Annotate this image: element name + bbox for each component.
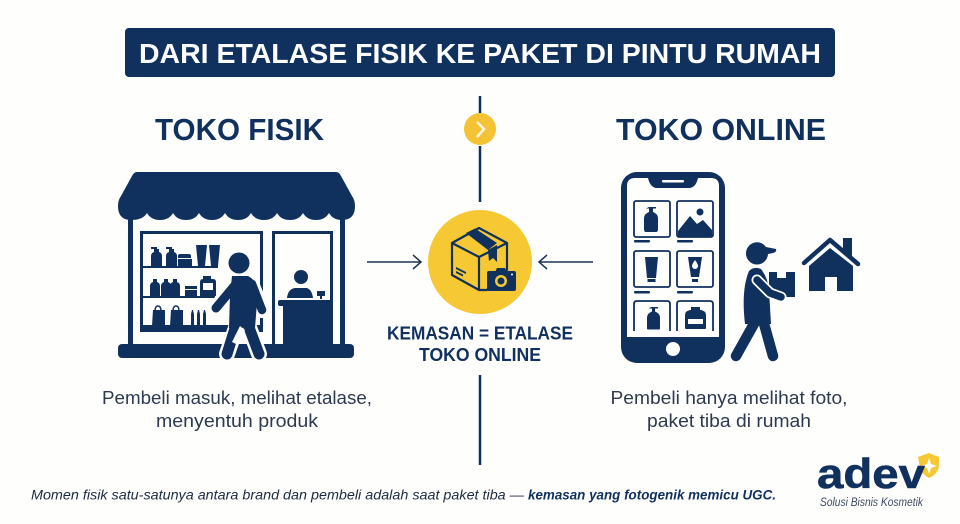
heading: toko online: TOKO ONLINE	[616, 112, 826, 147]
shop window	[140, 231, 263, 332]
center label: KEMASAN = ETALASE	[387, 324, 573, 344]
caption: toko online: Pembeli hanya melihat foto,	[610, 387, 848, 408]
caption: toko online: paket tiba di rumah	[647, 410, 811, 431]
products on middle shelf	[150, 279, 197, 296]
center label: TOKO ONLINE	[419, 345, 541, 365]
vertical divider	[479, 96, 481, 465]
footnote: Momen fisik satu-satunya antara brand dan pembeli adalah saat paket tiba —	[31, 486, 525, 502]
logo: adev	[817, 450, 939, 509]
icon: physical store	[118, 172, 355, 358]
footnote: kemasan yang fotogenik memicu UGC.	[528, 486, 776, 502]
caption: toko fisik: Pembeli masuk, melihat etalase,	[102, 387, 372, 408]
footnote	[31, 486, 776, 502]
title banner	[125, 28, 835, 77]
parcel	[769, 272, 795, 297]
caption: toko online	[610, 387, 848, 431]
tile captions	[634, 240, 693, 294]
cash register	[317, 291, 325, 299]
heading: toko fisik: TOKO FISIK	[155, 112, 325, 147]
logo shield	[918, 453, 939, 478]
window shelves	[143, 266, 218, 298]
icon: yellow chevron badge	[464, 113, 496, 145]
person entering store	[216, 252, 262, 354]
shop door	[272, 231, 333, 345]
store posts	[128, 218, 345, 346]
courier head and cap	[746, 242, 776, 265]
person halo	[216, 284, 262, 354]
tile contents	[644, 207, 712, 330]
courier arm	[757, 280, 781, 297]
caption: toko fisik	[102, 387, 372, 431]
caption: toko fisik: menyentuh produk	[156, 410, 319, 431]
phone home button	[666, 342, 680, 356]
product tiles	[634, 201, 713, 331]
products on bottom shelf	[152, 310, 183, 326]
icon: house	[804, 238, 858, 291]
icon: smartphone	[621, 172, 725, 363]
cashier	[287, 288, 313, 298]
logo tagline: Solusi Bisnis Kosmetik	[820, 497, 924, 509]
arrow: store to packaging	[367, 255, 421, 269]
store awning	[118, 172, 355, 220]
title banner: DARI ETALASE FISIK KE PAKET DI PINTU RUMAH	[139, 38, 821, 69]
products on top shelf	[151, 245, 220, 266]
arrow: online to packaging	[539, 255, 593, 269]
logo: adev: adev	[817, 450, 926, 497]
store base	[118, 344, 354, 358]
center label	[387, 324, 573, 365]
courier body	[744, 268, 771, 324]
phone speaker	[662, 180, 684, 182]
shop counter	[278, 300, 333, 345]
tile details	[688, 260, 703, 324]
icon: delivery courier	[736, 242, 795, 356]
phone screen	[627, 178, 719, 337]
icon: package with camera	[428, 210, 532, 314]
